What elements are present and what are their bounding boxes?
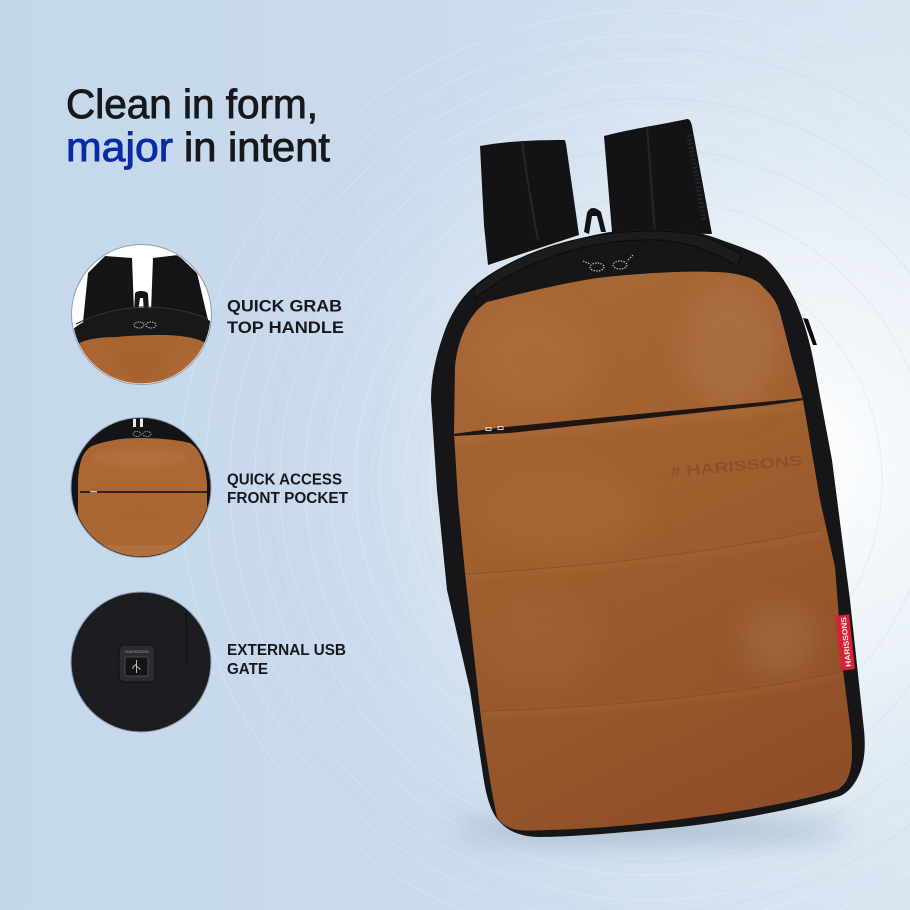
label: quick grab top handle: TOP HANDLE: [227, 318, 344, 337]
bag body: [431, 228, 865, 837]
label: external usb gate: GATE: [227, 661, 268, 678]
stitched seams: [465, 530, 820, 574]
red brand tag: HARISSONS: [839, 617, 853, 667]
zipper pulls: [583, 255, 633, 271]
handle loop: [584, 208, 606, 234]
detail circle: front pocket: [70, 415, 215, 565]
feature: quick access front pocket: [70, 415, 348, 565]
title: Clean in form,: [66, 81, 318, 127]
title: major: [66, 124, 173, 170]
detail circle: usb port: HARISSONS: [125, 649, 149, 654]
leather front panel: [454, 272, 852, 831]
right shoulder strap: [604, 119, 712, 234]
label: quick access front pocket: QUICK ACCESS: [227, 472, 342, 488]
feature: quick grab top handle: [70, 240, 344, 390]
title: in intent: [184, 124, 331, 170]
detail circle: usb port: [71, 592, 211, 732]
title: [66, 81, 331, 170]
label: quick access front pocket: [227, 472, 348, 507]
label: quick grab top handle: QUICK GRAB: [227, 296, 342, 316]
label: external usb gate: [227, 642, 346, 678]
zip sliders: [486, 426, 503, 430]
pocket zip slit: [453, 398, 804, 436]
label: quick access front pocket: FRONT POCKET: [227, 490, 348, 507]
handle strap: [473, 231, 741, 298]
bag shadow: [450, 818, 850, 842]
left shoulder strap: [480, 140, 579, 265]
label: external usb gate: EXTERNAL USB: [227, 642, 346, 659]
backpack: [431, 119, 870, 842]
label: quick grab top handle: [227, 296, 344, 337]
embossed logo: # HARISSONS: [670, 453, 803, 481]
side pull and side ridge: [803, 318, 817, 345]
detail circle: top handle: [70, 240, 215, 390]
feature: external usb gate: [71, 592, 346, 732]
red brand tag: [835, 614, 855, 671]
